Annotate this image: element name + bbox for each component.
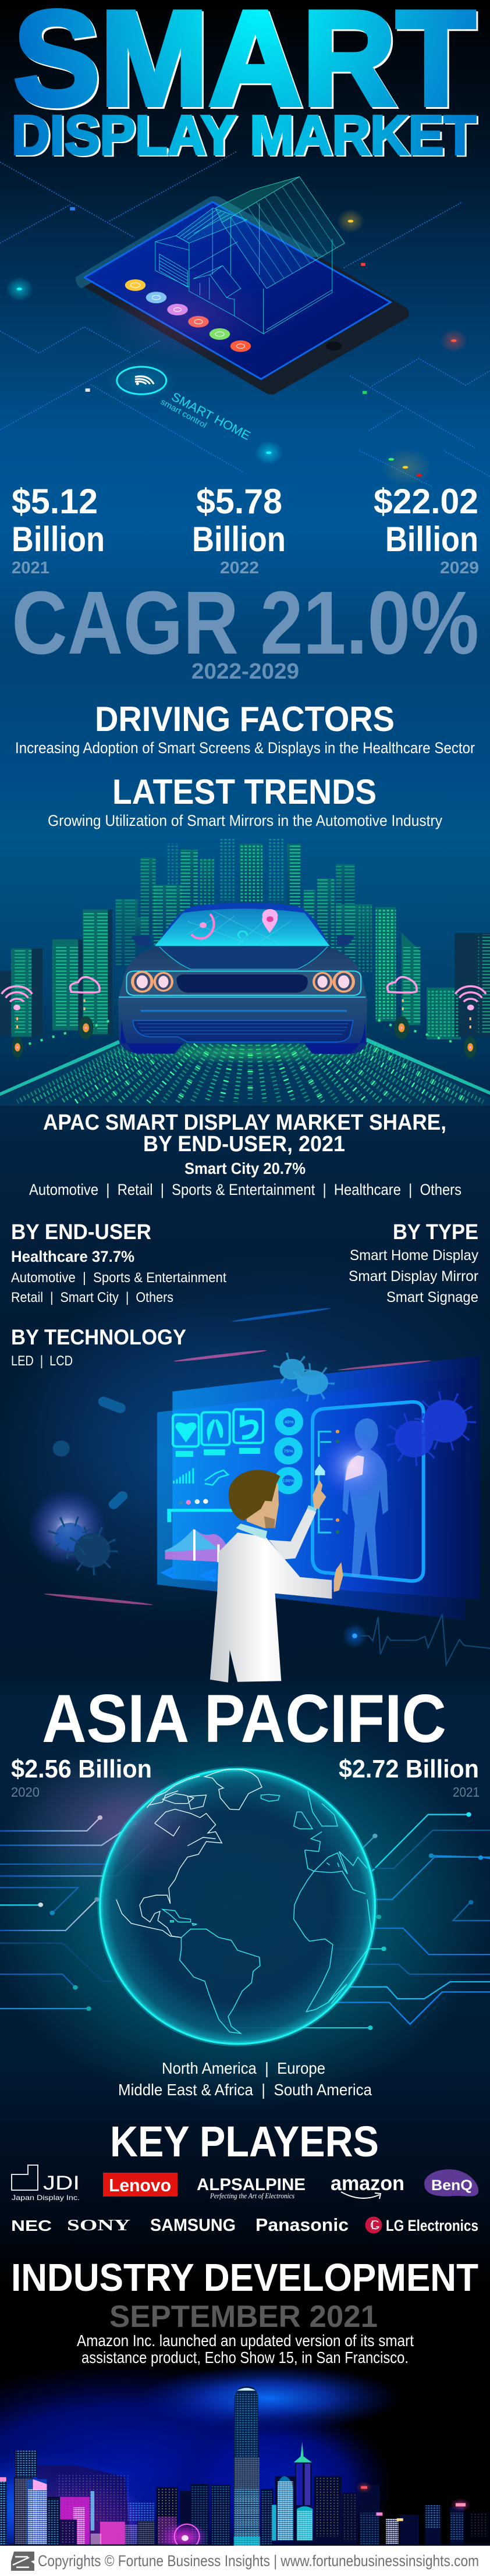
smart car scene bbox=[2, 903, 486, 1064]
title bbox=[12, 0, 478, 168]
title shadow: DISPLAY MARKET bbox=[13, 105, 478, 168]
smart home label: smart control bbox=[159, 397, 208, 430]
segment by type: BY TYPE bbox=[393, 1220, 478, 1244]
segment by end-user bbox=[11, 1220, 226, 1305]
other regions: North America | Europe bbox=[162, 2059, 325, 2077]
far skyline silhouettes bbox=[0, 2450, 490, 2548]
logo: Panasonic: Panasonic bbox=[255, 2215, 349, 2235]
body scan frame bbox=[313, 1402, 424, 1581]
stat: 2021: $5.12 bbox=[12, 482, 98, 521]
globe glow bbox=[0, 1704, 490, 2110]
segment by technology bbox=[11, 1325, 186, 1369]
organ tiles bbox=[173, 1409, 263, 1446]
stat: 2022 bbox=[192, 482, 286, 577]
road bbox=[0, 1038, 490, 1106]
stat: 2022: 2022 bbox=[220, 559, 259, 577]
segment by type: Smart Display Mirror bbox=[349, 1268, 478, 1285]
logo: BenQ bbox=[424, 2169, 478, 2197]
segment by end-user: Healthcare 37.7% bbox=[11, 1248, 134, 1265]
industry development: assistance product, Echo Show 15, in San Francisco. bbox=[81, 2348, 409, 2366]
circuit nodes bbox=[38, 1812, 483, 2030]
stat: 2022: Billion bbox=[192, 520, 286, 559]
globe scene bbox=[0, 1704, 490, 2110]
segment by end-user: BY END-USER bbox=[11, 1220, 151, 1244]
globe sphere bbox=[84, 1769, 375, 2044]
central tower bbox=[233, 2386, 260, 2547]
doctor bbox=[210, 1470, 343, 1683]
segment by technology: LED | LCD bbox=[11, 1353, 73, 1369]
asia pacific 2021 value: 2021 bbox=[453, 1784, 480, 1800]
latest trends: LATEST TRENDS bbox=[112, 772, 377, 811]
stat: 2029: 2029 bbox=[440, 559, 479, 577]
apac share heading: APAC SMART DISPLAY MARKET SHARE, bbox=[43, 1110, 446, 1135]
logo: Alps Alpine: ALPSALPINE bbox=[197, 2176, 306, 2194]
donut gauges: 75% bbox=[284, 1449, 293, 1453]
hero: smart home tablet bbox=[0, 151, 490, 486]
industry development bbox=[11, 2256, 478, 2366]
logo: Lenovo: Lenovo bbox=[109, 2175, 171, 2195]
footer bbox=[0, 2546, 490, 2576]
logo: JDI bbox=[12, 2165, 80, 2202]
road edges bbox=[0, 1038, 490, 1096]
segment by technology: BY TECHNOLOGY bbox=[11, 1325, 186, 1349]
footer logo bbox=[11, 2552, 34, 2571]
logo: Sony: SONY bbox=[67, 2216, 130, 2234]
logo: Alps Alpine: Perfecting the Art of Electronics bbox=[210, 2191, 294, 2200]
house wireframe bbox=[155, 176, 345, 333]
icon row bbox=[125, 279, 251, 352]
stat: 2021 bbox=[12, 482, 105, 577]
light streaks bbox=[44, 1307, 431, 1606]
asia pacific 2020 value: $2.56 Billion bbox=[11, 1755, 152, 1783]
title line two: DISPLAY MARKET bbox=[12, 104, 476, 166]
logo: Samsung: SAMSUNG bbox=[150, 2216, 236, 2235]
night city skyline bbox=[0, 2362, 490, 2576]
stat: 2029 bbox=[374, 482, 479, 577]
industry development: Amazon Inc. launched an updated version of its smart bbox=[77, 2332, 414, 2350]
stat: 2021: Billion bbox=[12, 520, 105, 559]
driving factors: DRIVING FACTORS bbox=[95, 700, 395, 739]
iot nodes and clouds bbox=[2, 977, 486, 1058]
pills bbox=[53, 1395, 130, 1511]
medical scene bbox=[0, 1252, 490, 1683]
dotted circuit lines bbox=[0, 151, 490, 486]
ambient glow bbox=[0, 1252, 490, 1648]
latest trends: Growing Utilization of Smart Mirrors in the Automotive Industry bbox=[48, 812, 442, 829]
donut gauges: 100% bbox=[282, 1478, 294, 1483]
connected car bbox=[118, 903, 367, 1054]
status lights bbox=[6, 207, 467, 486]
logo: JDI: JDI bbox=[43, 2172, 80, 2194]
donut gauges bbox=[278, 1413, 299, 1490]
lit buildings bbox=[0, 2442, 490, 2553]
glow under icons bbox=[106, 269, 269, 363]
smart home label: SMART HOME bbox=[169, 390, 253, 443]
segment by type bbox=[349, 1220, 478, 1305]
asia pacific 2020 value: 2020 bbox=[11, 1784, 40, 1800]
key players heading: KEY PLAYERS bbox=[110, 2117, 379, 2166]
logos bbox=[11, 2165, 478, 2235]
stat: 2029: Billion bbox=[385, 520, 478, 559]
segment by end-user: Retail | Smart City | Others bbox=[11, 1290, 173, 1305]
asia pacific 2020 value bbox=[11, 1755, 152, 1800]
sky glow bbox=[0, 2362, 400, 2576]
virus particles bbox=[52, 1357, 470, 1570]
latest trends bbox=[48, 772, 442, 829]
stat: 2021: 2021 bbox=[12, 559, 49, 577]
apac share heading bbox=[29, 1110, 461, 1198]
stat: 2029: $22.02 bbox=[374, 482, 478, 521]
logo: Amazon: amazon bbox=[331, 2172, 404, 2195]
other regions: Middle East & Africa | South America bbox=[118, 2081, 372, 2099]
holographic panels bbox=[157, 1356, 480, 1620]
road dashes bbox=[17, 1045, 483, 1102]
city skyline behind car bbox=[0, 838, 490, 1039]
logo: JDI: Japan Display Inc. bbox=[12, 2194, 80, 2202]
bars and line chart bbox=[165, 1468, 237, 1580]
asia pacific heading: ASIA PACIFIC bbox=[42, 1680, 446, 1757]
donut gauges: 40% bbox=[285, 1420, 294, 1424]
logo: NEC: NEC bbox=[11, 2217, 52, 2234]
tile labels bbox=[176, 1448, 260, 1457]
logo: BenQ: BenQ bbox=[431, 2177, 473, 2194]
continents bbox=[116, 1769, 372, 2034]
cagr: 2022-2029 bbox=[191, 659, 299, 684]
wifi ring bbox=[107, 360, 176, 401]
segment by type: Smart Signage bbox=[386, 1289, 478, 1305]
segment by end-user: Automotive | Sports & Entertainment bbox=[11, 1270, 226, 1286]
industry development: SEPTEMBER 2021 bbox=[109, 2300, 378, 2334]
stat: 2022: $5.78 bbox=[196, 482, 282, 521]
asia pacific 2021 value bbox=[339, 1755, 480, 1800]
segment by type: Smart Home Display bbox=[350, 1247, 478, 1264]
apac share heading: Smart City 20.7% bbox=[184, 1159, 306, 1177]
asia pacific 2021 value: $2.72 Billion bbox=[339, 1755, 479, 1783]
car underglow bbox=[81, 1041, 406, 1064]
tablet body bbox=[76, 196, 409, 395]
apac share heading: BY END-USER, 2021 bbox=[143, 1132, 345, 1156]
heartbeat line bbox=[360, 1614, 490, 1665]
other regions bbox=[118, 2059, 372, 2099]
circuit lines bbox=[0, 1815, 490, 2028]
driving factors bbox=[15, 700, 475, 757]
